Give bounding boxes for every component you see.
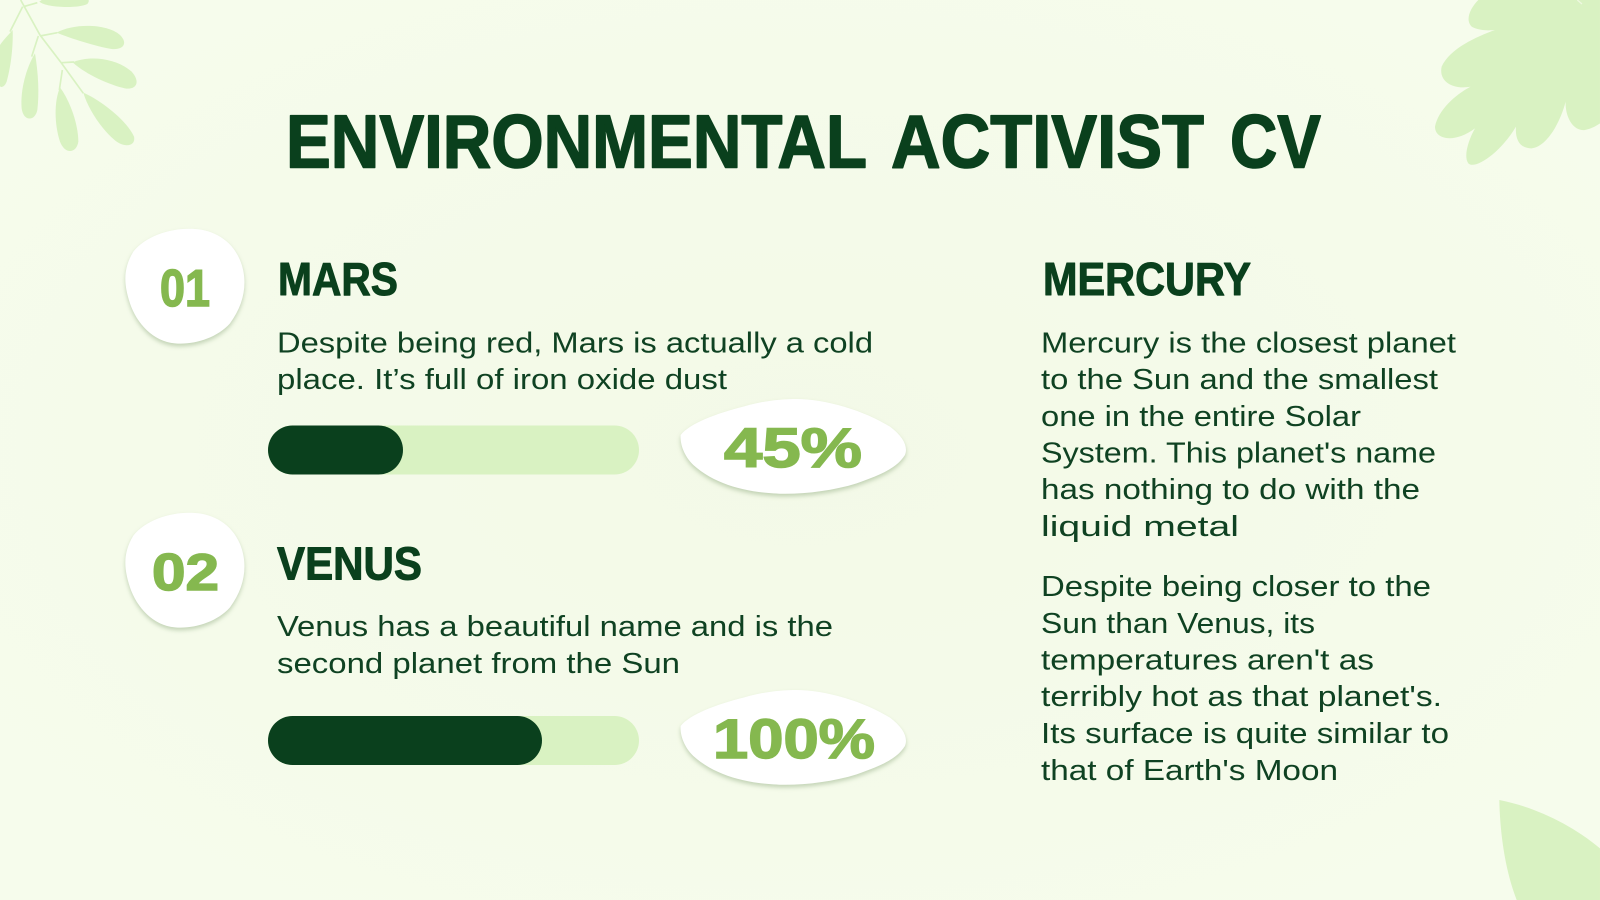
text: Mars description: [277, 328, 873, 396]
text: Mercury paragraph 1: one in the entire Solar: [1041, 401, 1361, 433]
panel: Venus: [125, 513, 906, 785]
text: Mercury paragraph 2: terribly hot as that planet's.: [1041, 681, 1442, 713]
progress bar: Mars: [268, 426, 639, 474]
text: Mercury paragraph 1: has nothing to do with the: [1041, 474, 1420, 506]
text: Mars description: place. It’s full of iron oxide dust: [277, 364, 727, 396]
text: Mercury paragraph 2: temperatures aren't as: [1041, 644, 1374, 676]
text: Mercury paragraph 1: to the Sun and the smallest: [1041, 364, 1438, 396]
percentage badge: 100%: 100%: [713, 707, 875, 770]
percentage badge: 100%: [681, 690, 906, 785]
text: Mercury paragraph 2: that of Earth's Moon: [1041, 755, 1338, 787]
number badge 02: [125, 513, 244, 628]
panel: Mars: [125, 229, 906, 494]
text: Venus description: [277, 611, 833, 680]
percentage badge: 45%: [681, 399, 906, 494]
text: Mercury paragraph 2: Its surface is quite similar to: [1041, 718, 1449, 750]
heading: Venus: VENUS: [277, 538, 422, 590]
text: Mercury paragraph 2: Sun than Venus, its: [1041, 608, 1315, 640]
heading: Mercury: MERCURY: [1043, 253, 1251, 305]
heading: Mars: MARS: [278, 253, 398, 305]
title: [286, 100, 1321, 184]
text: Mercury paragraph 2: Despite being closer to the: [1041, 571, 1431, 603]
percentage badge: 45%: 45%: [724, 416, 862, 479]
number badge 02: 02: [152, 544, 219, 602]
text: Mercury paragraph 1: liquid metal: [1041, 511, 1239, 543]
text: Mercury paragraph 1: System. This planet's name: [1041, 438, 1436, 470]
text: Mars description: Despite being red, Mars is actually a cold: [277, 328, 873, 360]
number badge 01: [125, 229, 244, 344]
text: Mercury paragraph 1: [1041, 328, 1456, 543]
decoration: leaf branch top left: [0, 0, 137, 151]
text: Venus description: Venus has a beautiful name and is the: [277, 611, 833, 643]
text: Venus description: second planet from the Sun: [277, 648, 680, 680]
title: ACTIVIST: [891, 100, 1204, 184]
decoration: leaf top right: [1435, 0, 1600, 165]
panel: Mercury: [1041, 253, 1456, 787]
decoration: leaf bottom right: [1499, 800, 1600, 900]
text: Mercury paragraph 1: Mercury is the closest planet: [1041, 328, 1456, 360]
text: Mercury paragraph 2: [1041, 571, 1449, 787]
number badge 01: 01: [160, 260, 210, 318]
progress bar: Venus: [268, 716, 639, 765]
title: ENVIRONMENTAL: [286, 100, 867, 184]
title: CV: [1230, 100, 1321, 184]
